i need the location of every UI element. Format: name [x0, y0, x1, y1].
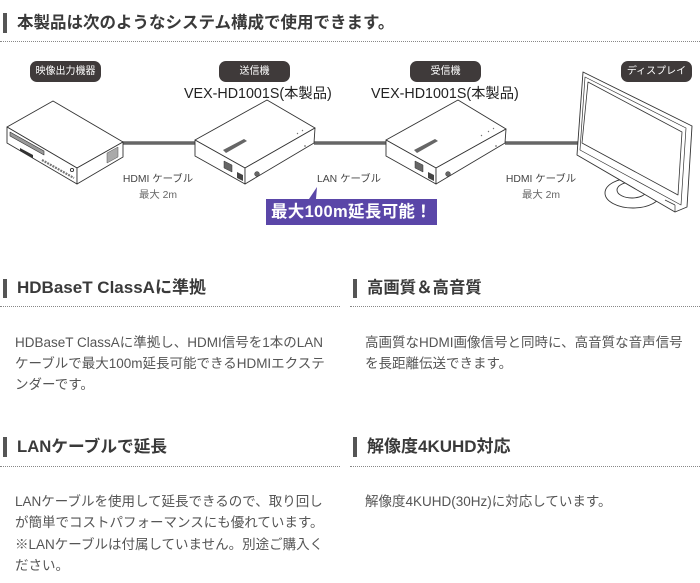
panel: high quality: 高画質なHDMI画像信号と同時に、高音質な音声信号: [365, 335, 683, 350]
panel: 4K UHD resolution: 解像度4KUHD(30Hz)に対応しています。: [365, 494, 612, 509]
icon: video output device: [7, 101, 123, 184]
top heading: 本製品は次のようなシステム構成で使用できます。: [17, 14, 394, 32]
model name: transmitter: VEX-HD1001S(本製品): [184, 86, 332, 102]
panel: HDBaseT ClassA: [0, 278, 340, 392]
icon: receiver: [386, 100, 506, 184]
panel: LAN cable extension: ださい。: [15, 558, 69, 573]
label: transmitter: 送信機: [240, 66, 270, 77]
icon: display monitor: [577, 72, 692, 212]
label: receiver: [410, 61, 481, 82]
panel: LAN cable extension: ※LANケーブルは付属していません。別途ご購入く: [15, 537, 323, 552]
label: video output device: [30, 61, 101, 82]
panel: high quality: [350, 278, 700, 371]
panel: HDBaseT ClassA: HDBaseT ClassAに準拠: [17, 278, 206, 297]
panel: HDBaseT ClassA: ケーブルで最大100m延長可能できるHDMIエクステ: [15, 356, 325, 371]
caption: LAN cable: LAN ケーブル: [317, 174, 381, 185]
callout: 100m extension: [266, 187, 437, 225]
callout: 100m extension: 最大100m延長可能！: [271, 203, 432, 221]
panel: LAN cable extension: [0, 437, 340, 573]
panel: 4K UHD resolution: 解像度4KUHD対応: [367, 437, 511, 456]
label: display: [621, 61, 692, 82]
caption: HDMI cable right: 最大 2m: [522, 190, 560, 201]
panel: high quality: を長距離伝送できます。: [365, 356, 512, 371]
panel: LAN cable extension: LANケーブルで延長: [17, 437, 167, 456]
label: display: ディスプレイ: [627, 66, 686, 77]
label: transmitter: [219, 61, 290, 82]
system diagram: [6, 72, 692, 212]
panel: HDBaseT ClassA: HDBaseT ClassAに準拠し、HDMI信号を1本のLAN: [15, 335, 323, 350]
panel: HDBaseT ClassA: ンダーです。: [15, 377, 94, 392]
model name: receiver: VEX-HD1001S(本製品): [371, 86, 519, 102]
caption: HDMI cable left: [123, 173, 193, 201]
caption: HDMI cable left: HDMI ケーブル: [123, 174, 193, 185]
caption: HDMI cable left: 最大 2m: [139, 190, 177, 201]
cables: [122, 141, 581, 145]
panel: LAN cable extension: LANケーブルを使用して延長できるので、取り回し: [15, 494, 323, 509]
panel: high quality: 高画質＆高音質: [367, 279, 482, 297]
panel: LAN cable extension: が簡単でコストパフォーマンスにも優れています。: [15, 515, 323, 530]
label: video output device: 映像出力機器: [36, 66, 96, 77]
caption: HDMI cable right: [506, 173, 576, 201]
caption: HDMI cable right: HDMI ケーブル: [506, 174, 576, 185]
label: receiver: 受信機: [430, 66, 460, 77]
icon: transmitter: [195, 100, 315, 184]
panel: 4K UHD resolution: [350, 437, 700, 509]
